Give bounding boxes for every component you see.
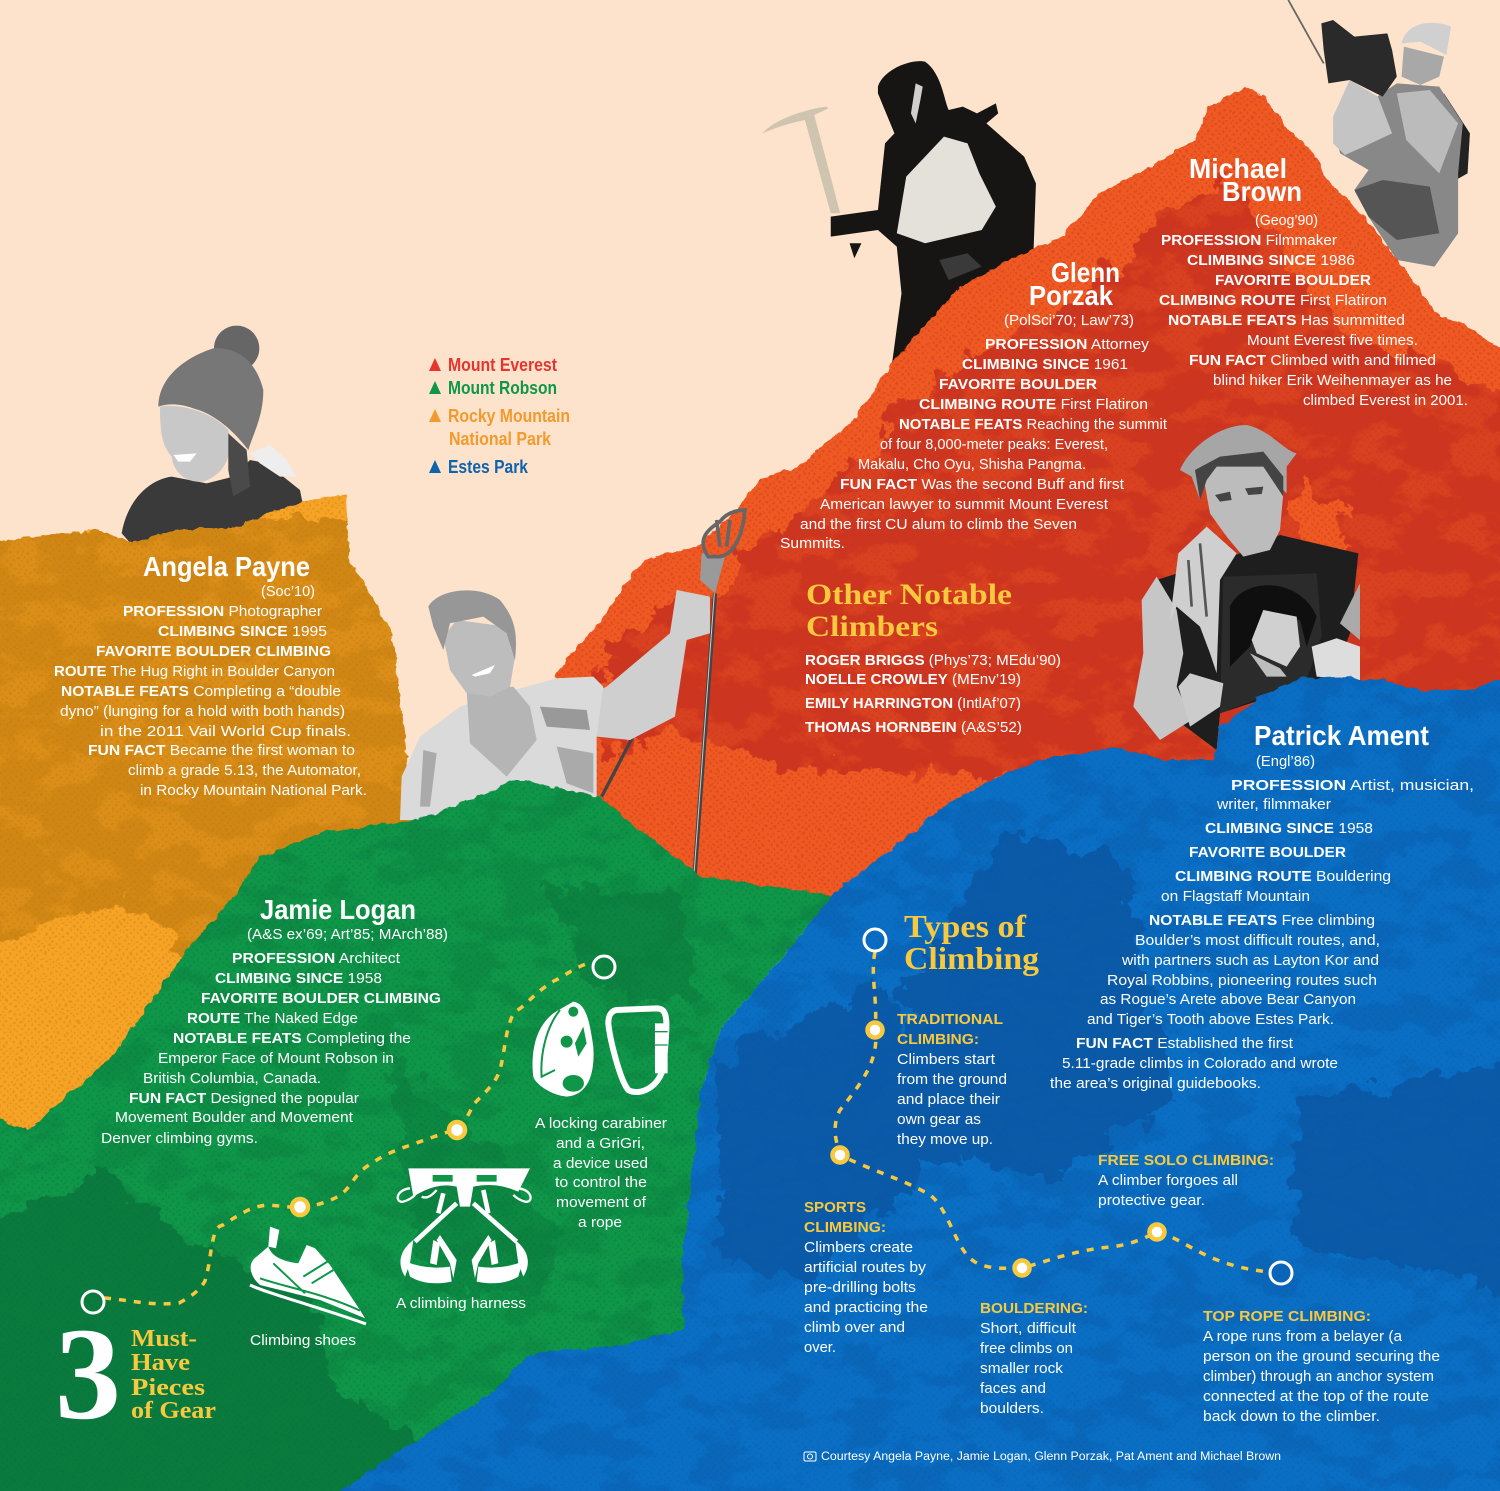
profile: Patrick Ament: on Flagstaff Mountain (1161, 889, 1310, 905)
text: sports climbing: SPORTS (804, 1200, 866, 1216)
profile: Glenn Porzak (780, 257, 1167, 552)
profile: Patrick Ament: CLIMBING SINCE 1958 (1205, 821, 1373, 837)
profile: Angela Payne: NOTABLE FEATS Completing a “double (61, 684, 341, 700)
heading: types of climbing (904, 908, 1039, 976)
icon: climbing shoe (250, 1227, 366, 1324)
profile: Jamie Logan: FAVORITE BOULDER CLIMBING (201, 991, 441, 1007)
heading: types of climbing: Climbing (904, 940, 1039, 976)
profile: Michael Brown: blind hiker Erik Weihenmayer as he (1213, 373, 1452, 389)
profile: Angela Payne: in the 2011 Vail World Cup finals. (100, 724, 351, 740)
panel: other notable climbers: ROGER BRIGGS (Phys’73; MEdu’90) (805, 653, 1061, 669)
profile: Patrick Ament: 5.11-grade climbs in Colorado and wrote (1062, 1056, 1338, 1072)
profile: Patrick Ament: writer, filmmaker (1216, 797, 1331, 813)
profile: Angela Payne: dyno” (lunging for a hold with both hands) (60, 704, 345, 720)
photo: Glenn Porzak with ice axe (762, 61, 1036, 363)
photo credit: Courtesy Angela Payne, Jamie Logan, Glenn Porzak, Pat Ament and Michael Brown (821, 1451, 1281, 1463)
text: sports climbing: artificial routes by (804, 1260, 927, 1276)
gear captions: Climbing shoes (250, 1333, 356, 1349)
text: traditional climbing: CLIMBING: (897, 1032, 979, 1048)
profile: Patrick Ament (1050, 720, 1474, 1092)
text: top rope climbing: connected at the top of the route (1203, 1389, 1429, 1405)
profile: Patrick Ament: and Tiger’s Tooth above Estes Park. (1087, 1012, 1334, 1028)
text: free solo climbing: protective gear. (1098, 1193, 1205, 1209)
profile: Jamie Logan: Denver climbing gyms. (101, 1131, 258, 1147)
text: sports climbing (804, 1200, 928, 1356)
heading: 3 must-have pieces of gear: Must- (131, 1326, 197, 1352)
photo: Angela Payne (122, 326, 303, 547)
photo: Patrick Ament with book (1133, 425, 1360, 750)
icon: GriGri (533, 1002, 594, 1097)
profile: Angela Payne: CLIMBING SINCE 1995 (158, 624, 327, 640)
photo: Michael Brown with camera (1288, 0, 1470, 267)
profile: Glenn Porzak: American lawyer to summit Mount Everest (820, 497, 1108, 513)
profile: Glenn Porzak: of four 8,000-meter peaks: Everest, (880, 437, 1108, 453)
text: free solo climbing: FREE SOLO CLIMBING: (1098, 1153, 1274, 1169)
gear captions (250, 1116, 667, 1349)
profile: Jamie Logan: CLIMBING SINCE 1958 (215, 971, 382, 987)
text: bouldering: Short, difficult (980, 1321, 1076, 1337)
mountain: Mount Robson (0, 770, 840, 1491)
heading: 3 must-have pieces of gear: Pieces (131, 1375, 205, 1401)
profile: Michael Brown: climbed Everest in 2001. (1303, 393, 1468, 409)
mountain: Mount Everest (540, 80, 1500, 920)
text: bouldering: free climbs on (980, 1341, 1073, 1357)
profile: Michael Brown: PROFESSION Filmmaker (1161, 233, 1337, 249)
profile: Patrick Ament: CLIMBING ROUTE Bouldering (1175, 869, 1391, 885)
profile: Jamie Logan: British Columbia, Canada. (143, 1071, 321, 1087)
panel: other notable climbers: Climbers (806, 610, 938, 643)
profile: Patrick Ament: Royal Robbins, pioneering routes such (1107, 973, 1377, 989)
text: sports climbing: Climbers create (804, 1240, 913, 1256)
legend: Mount Everest (448, 355, 557, 375)
icon: locking carabiner (608, 1008, 668, 1092)
panel: other notable climbers: NOELLE CROWLEY (MEnv’19) (805, 672, 1021, 688)
legend: Estes Park (448, 457, 529, 477)
text: sports climbing: climb over and (804, 1320, 905, 1336)
profile: Jamie Logan: PROFESSION Architect (232, 951, 400, 967)
text: top rope climbing: TOP ROPE CLIMBING: (1203, 1309, 1371, 1325)
text: bouldering: BOULDERING: (980, 1301, 1088, 1317)
gear captions: a device used (553, 1156, 648, 1172)
dashed trail: gear (82, 956, 615, 1313)
panel: other notable climbers: Other Notable (806, 578, 1012, 611)
legend: Mount Robson (448, 378, 557, 398)
profile: Patrick Ament: with partners such as Layton Kor and (1121, 953, 1379, 969)
text: free solo climbing (1098, 1153, 1274, 1209)
profile: Glenn Porzak: Makalu, Cho Oyu, Shisha Pangma. (858, 457, 1086, 473)
text: traditional climbing: TRADITIONAL (897, 1012, 1003, 1028)
profile: Glenn Porzak: PROFESSION Attorney (985, 337, 1150, 353)
mountain: Estes Park (270, 670, 1500, 1491)
profile: Angela Payne: climb a grade 5.13, the Automator, (128, 763, 361, 779)
profile: Jamie Logan: Jamie Logan (260, 894, 416, 925)
legend: Rocky Mountain (448, 406, 570, 426)
profile: Patrick Ament: as Rogue’s Arete above Bear Canyon (1100, 992, 1356, 1008)
profile: Glenn Porzak: Summits. (780, 536, 845, 552)
profile: Patrick Ament: Patrick Ament (1254, 720, 1429, 751)
profile: Glenn Porzak: Glenn (1051, 257, 1120, 288)
profile: Patrick Ament: Boulder’s most difficult routes, and, (1135, 933, 1380, 949)
text: traditional climbing: from the ground (897, 1072, 1007, 1088)
mountain: Rocky Mountain National Park (0, 494, 413, 1130)
text: bouldering: boulders. (980, 1401, 1044, 1417)
text: traditional climbing: they move up. (897, 1132, 993, 1148)
profile: Glenn Porzak: and the first CU alum to climb the Seven (800, 517, 1077, 533)
gear captions: A climbing harness (396, 1296, 526, 1312)
profile: Glenn Porzak: (PolSci’70; Law’73) (1004, 313, 1134, 329)
panel: other notable climbers (805, 578, 1061, 736)
profile: Angela Payne: FUN FACT Became the first woman to (88, 743, 355, 759)
profile: Michael Brown: NOTABLE FEATS Has summitted (1168, 313, 1405, 329)
gear captions: movement of (556, 1195, 647, 1211)
text: traditional climbing (897, 1012, 1007, 1148)
heading: types of climbing: Types of (904, 908, 1026, 944)
profile: Angela Payne: FAVORITE BOULDER CLIMBING (96, 644, 331, 660)
profile: Michael Brown: Michael (1189, 153, 1287, 184)
heading: 3 must-have pieces of gear: 3 (55, 1300, 121, 1447)
text: traditional climbing: own gear as (897, 1112, 981, 1128)
heading: 3 must-have pieces of gear (55, 1300, 216, 1447)
text: traditional climbing: and place their (897, 1092, 1000, 1108)
photo: Jamie Logan with rope hardware (400, 510, 745, 893)
text: top rope climbing: person on the ground securing the (1203, 1349, 1440, 1365)
profile: Michael Brown: FUN FACT Climbed with and filmed (1189, 353, 1436, 369)
gear captions: a rope (578, 1215, 622, 1231)
text: bouldering (980, 1301, 1088, 1417)
profile: Glenn Porzak: CLIMBING SINCE 1961 (962, 357, 1128, 373)
profile: Glenn Porzak: FAVORITE BOULDER (939, 377, 1098, 393)
text: free solo climbing: A climber forgoes all (1098, 1173, 1238, 1189)
profile: Angela Payne: PROFESSION Photographer (123, 604, 322, 620)
text: traditional climbing: Climbers start (897, 1052, 995, 1068)
gear captions: A locking carabiner (535, 1116, 667, 1132)
profile: Jamie Logan (101, 894, 448, 1147)
dashed trail: climbing types (832, 929, 1292, 1284)
panel: other notable climbers: EMILY HARRINGTON (IntlAf’07) (805, 696, 1021, 712)
profile: Glenn Porzak: FUN FACT Was the second Buff and first (840, 477, 1124, 493)
profile: Michael Brown: CLIMBING ROUTE First Flatiron (1159, 293, 1387, 309)
text: sports climbing: and practicing the (804, 1300, 928, 1316)
profile: Angela Payne (54, 551, 367, 799)
profile: Jamie Logan: FUN FACT Designed the popular (129, 1091, 359, 1107)
icon: climbing harness (398, 1168, 531, 1283)
profile: Angela Payne: in Rocky Mountain National Park. (140, 783, 367, 799)
profile: Jamie Logan: Emperor Face of Mount Robson in (158, 1051, 394, 1067)
text: top rope climbing: climber) through an anchor system (1203, 1369, 1434, 1385)
profile: Michael Brown: Mount Everest five times. (1247, 333, 1418, 349)
profile: Jamie Logan: ROUTE The Naked Edge (187, 1011, 358, 1027)
gear captions: and a GriGri, (556, 1136, 645, 1152)
text: top rope climbing: back down to the climber. (1203, 1409, 1380, 1425)
legend (429, 355, 570, 477)
panel: other notable climbers: THOMAS HORNBEIN (A&S’52) (805, 720, 1022, 736)
heading: 3 must-have pieces of gear: Have (131, 1350, 190, 1376)
profile: Patrick Ament: NOTABLE FEATS Free climbing (1149, 913, 1375, 929)
text: bouldering: faces and (980, 1381, 1046, 1397)
profile: Jamie Logan: (A&S ex’69; Art’85; MArch’88) (247, 927, 448, 943)
profile: Glenn Porzak: CLIMBING ROUTE First Flatiron (919, 397, 1148, 413)
text: sports climbing: pre-drilling bolts (804, 1280, 916, 1296)
profile: Jamie Logan: NOTABLE FEATS Completing the (173, 1031, 411, 1047)
gear captions: to control the (555, 1175, 647, 1191)
text: sports climbing: CLIMBING: (804, 1220, 886, 1236)
profile: Michael Brown: FAVORITE BOULDER (1215, 273, 1372, 289)
profile: Michael Brown: Brown (1222, 176, 1302, 207)
text: top rope climbing: A rope runs from a belayer (a (1203, 1329, 1403, 1345)
profile: Jamie Logan: Movement Boulder and Movement (115, 1110, 353, 1126)
profile: Angela Payne: (Soc’10) (261, 584, 315, 600)
text: bouldering: smaller rock (980, 1361, 1064, 1377)
profile: Patrick Ament: FAVORITE BOULDER (1189, 845, 1347, 861)
profile: Glenn Porzak: NOTABLE FEATS Reaching the summit (899, 417, 1167, 433)
profile: Glenn Porzak: Porzak (1029, 280, 1113, 311)
profile: Michael Brown: CLIMBING SINCE 1986 (1187, 253, 1355, 269)
profile: Patrick Ament: PROFESSION Artist, musician, (1231, 778, 1474, 794)
profile: Angela Payne: Angela Payne (143, 551, 310, 582)
profile: Angela Payne: ROUTE The Hug Right in Boulder Canyon (54, 664, 335, 680)
profile: Patrick Ament: the area’s original guidebooks. (1050, 1076, 1261, 1092)
heading: 3 must-have pieces of gear: of Gear (131, 1398, 216, 1424)
profile: Patrick Ament: FUN FACT Established the first (1076, 1036, 1293, 1052)
text: top rope climbing (1203, 1309, 1440, 1425)
legend: National Park (449, 429, 552, 449)
profile: Michael Brown (1159, 153, 1468, 409)
profile: Michael Brown: (Geog’90) (1255, 213, 1318, 229)
profile: Patrick Ament: (Engl’86) (1256, 754, 1315, 770)
text: sports climbing: over. (804, 1340, 836, 1356)
